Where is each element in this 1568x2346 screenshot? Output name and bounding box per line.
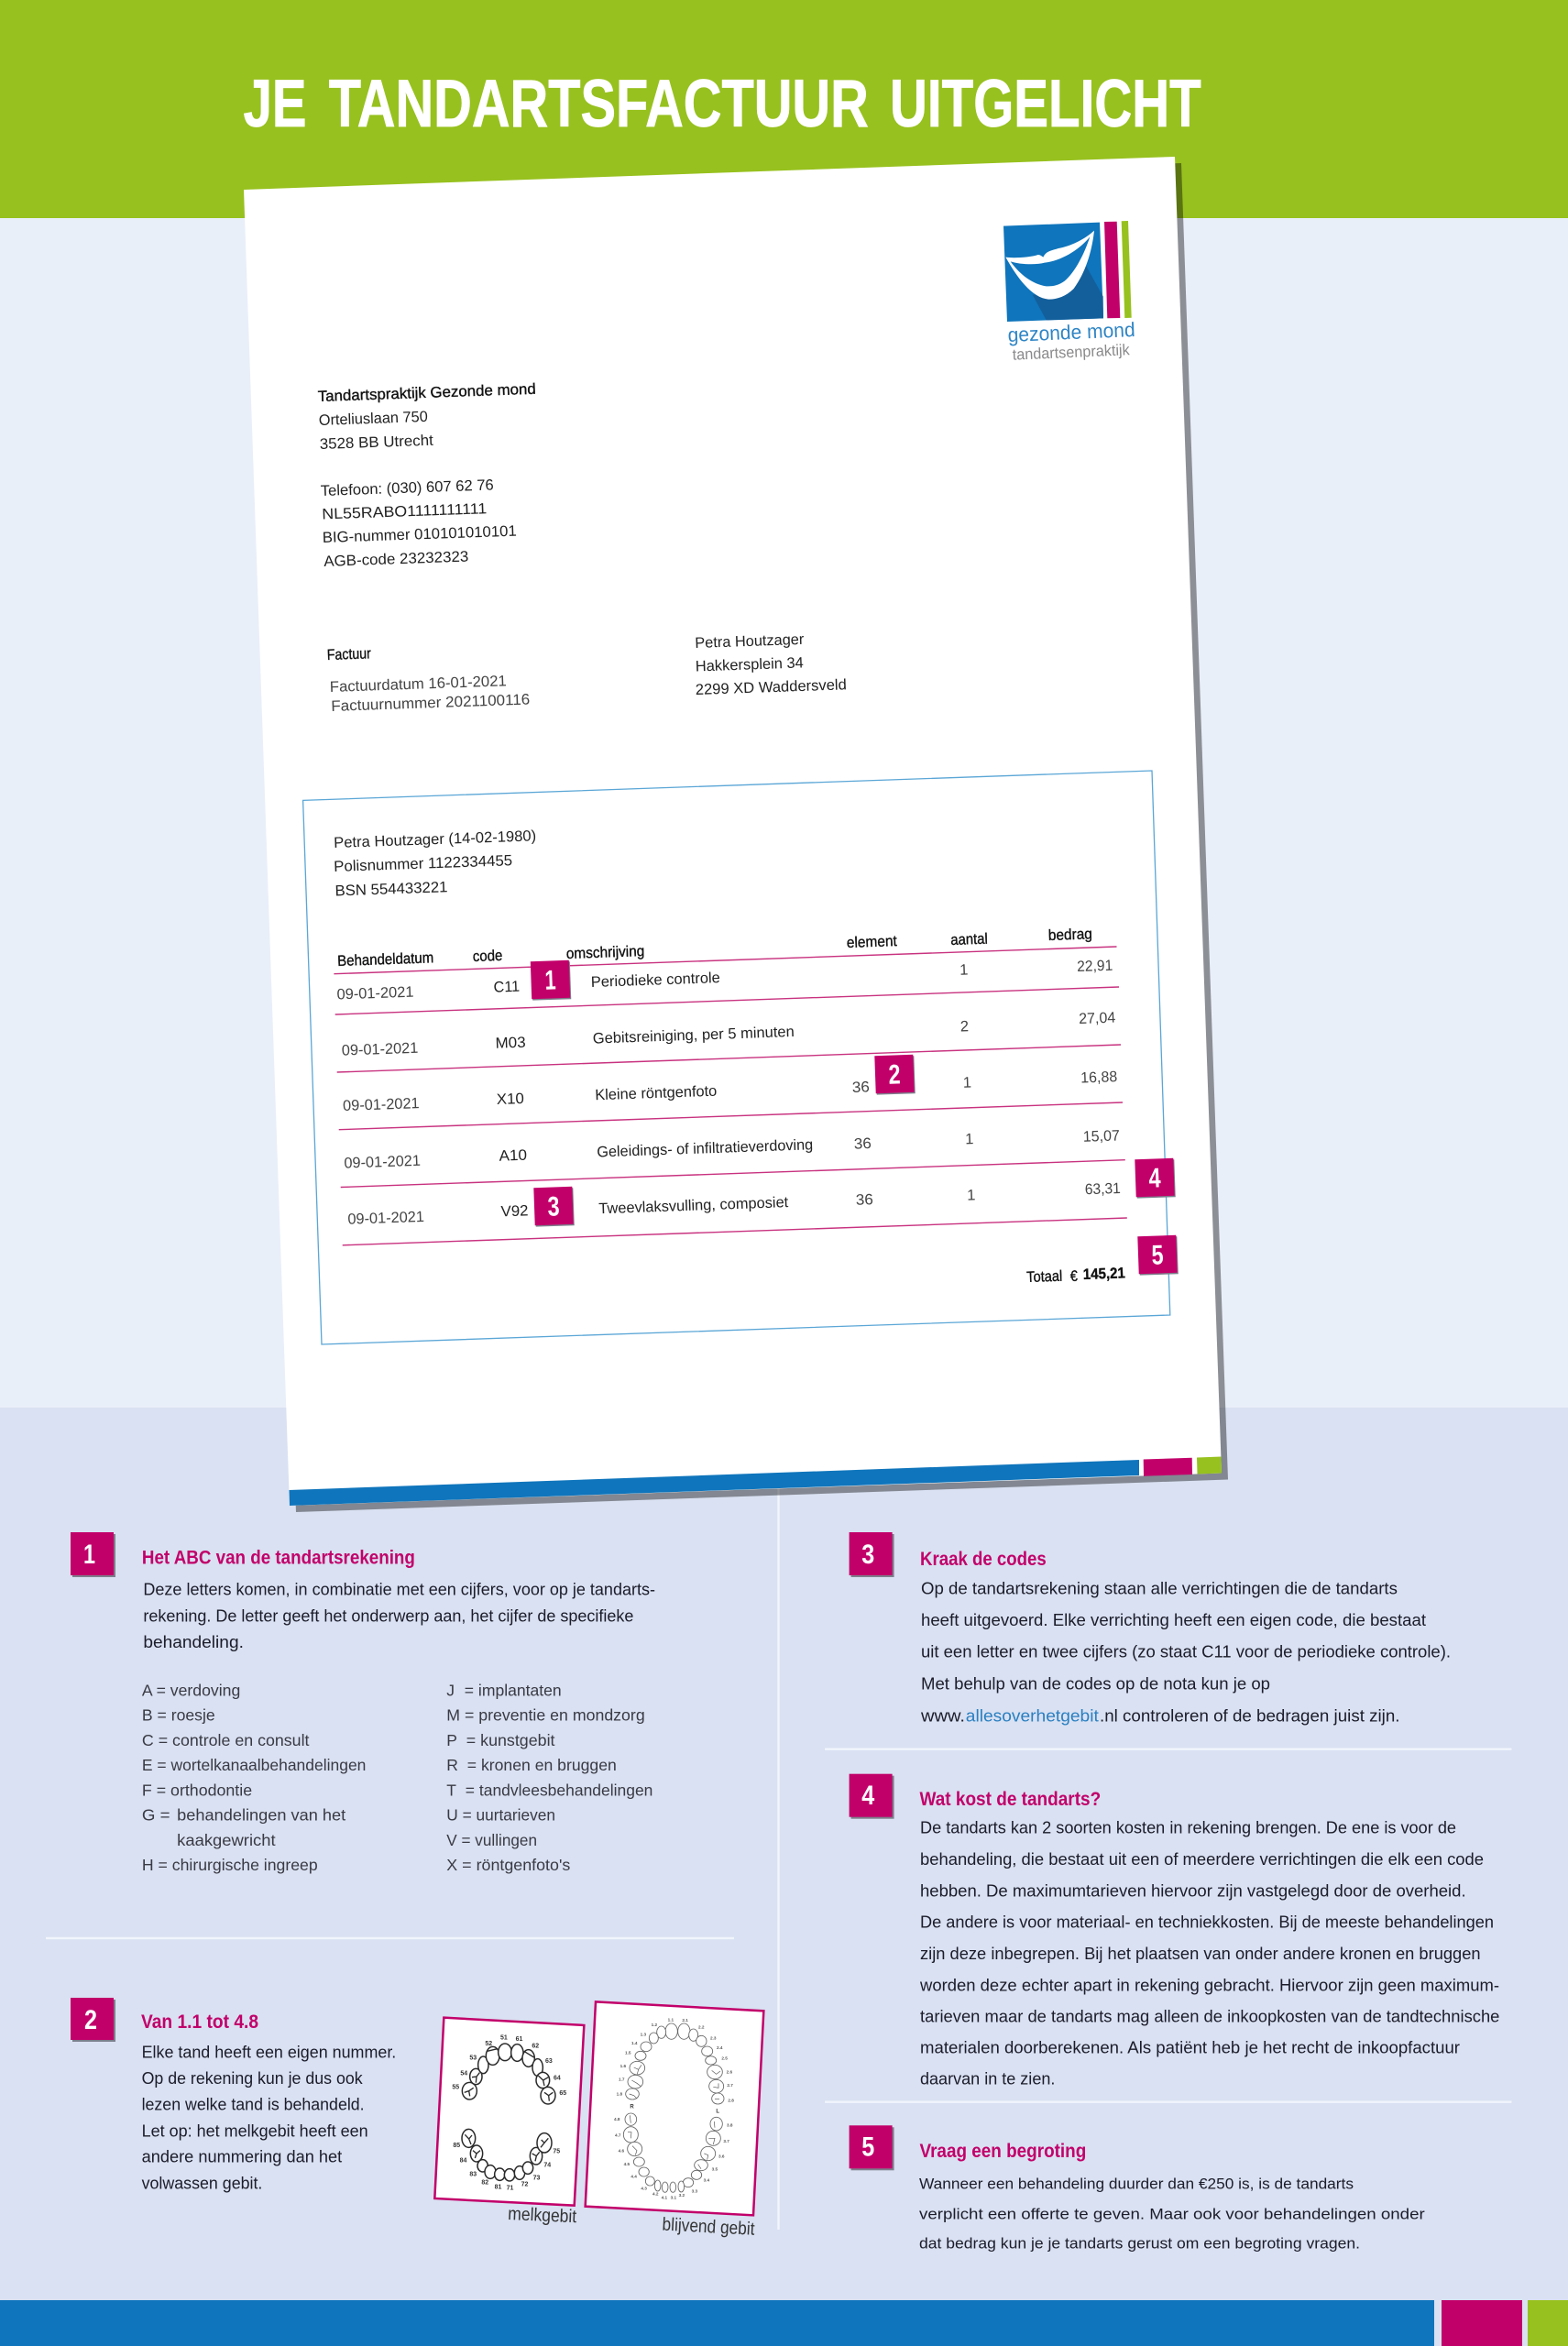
chart: melkgebit tooth diagram: 81 bbox=[495, 2185, 502, 2191]
chart: blijvend gebit tooth diagram: 4.7 bbox=[615, 2133, 621, 2138]
table row: M03: 09-01-2021 bbox=[342, 1040, 419, 1059]
chart: blijvend gebit tooth diagram: 1.5 bbox=[625, 2051, 631, 2055]
chart: blijvend gebit tooth diagram: 1.3 bbox=[641, 2032, 647, 2036]
invoice total: 145,21 bbox=[1083, 1265, 1125, 1283]
badge 3 bbox=[850, 1532, 894, 1577]
table row: X10 bbox=[343, 1069, 1118, 1114]
practice address: BIG-nummer 010101010101 bbox=[323, 523, 517, 546]
chart: blijvend gebit tooth diagram: 2.5 bbox=[721, 2056, 728, 2061]
invoice marker 5 bbox=[1137, 1235, 1179, 1276]
practice address: 3528 BB Utrecht bbox=[320, 433, 433, 453]
chart: melkgebit tooth diagram: 85 bbox=[453, 2143, 460, 2149]
practice address: Orteliuslaan 750 bbox=[319, 409, 428, 429]
paper footer colour band bbox=[290, 1457, 1222, 1506]
body text bbox=[920, 1578, 1451, 1725]
title: UITGELICHT bbox=[890, 67, 1201, 141]
practice address: NL55RABO1111111111 bbox=[322, 500, 488, 522]
heading: Van 1.1 tot 4.8: Van 1.1 tot 4.8 bbox=[141, 2012, 258, 2033]
invoice total bbox=[1026, 1265, 1125, 1286]
chart: blijvend gebit tooth diagram: 2.8 bbox=[728, 2098, 734, 2102]
invoice marker 2 bbox=[874, 1055, 916, 1095]
invoice marker 1: 1 bbox=[544, 965, 556, 996]
chart: blijvend gebit tooth diagram: 4.6 bbox=[619, 2149, 625, 2154]
body text: allesoverhetgebit bbox=[966, 1705, 1099, 1725]
heading: Vraag een begroting: Vraag een begroting bbox=[920, 2141, 1086, 2162]
table row: V92 bbox=[347, 1180, 1121, 1228]
badge 4: 4 bbox=[861, 1781, 875, 1811]
panel: invoice paper bbox=[244, 157, 1222, 1506]
code list right: = tandvleesbehandelingen bbox=[466, 1781, 652, 1799]
patient details bbox=[334, 828, 536, 899]
code list left: kaakgewricht bbox=[177, 1831, 276, 1849]
table row: V92: Tweevlaksvulling, composiet bbox=[598, 1194, 789, 1217]
badge 5 bbox=[850, 2125, 894, 2170]
body text: dat bedrag kun je je tandarts gerust om een begroting vragen. bbox=[919, 2235, 1360, 2253]
chart: melkgebit tooth diagram: 71 bbox=[507, 2185, 514, 2191]
panel: section 2 tooth numbers bbox=[71, 1998, 763, 2240]
chart: melkgebit tooth diagram: 65 bbox=[559, 2090, 566, 2097]
badge 2 bbox=[71, 1998, 115, 2042]
body text: Op de tandartsrekening staan alle verrichtingen die de tandarts bbox=[921, 1578, 1398, 1597]
body text bbox=[142, 2043, 396, 2192]
body text bbox=[919, 1818, 1499, 2088]
code list left: B = roesje bbox=[142, 1706, 215, 1725]
code list right bbox=[446, 1682, 652, 1874]
code list right: = implantaten bbox=[465, 1682, 562, 1700]
chart: blijvend gebit tooth diagram: 3.2 bbox=[679, 2193, 685, 2198]
code list right: P bbox=[446, 1731, 457, 1749]
practice address: Telefoon: (030) 607 62 76 bbox=[321, 477, 494, 499]
table header bbox=[337, 926, 1092, 970]
body text: zijn deze inbegrepen. Bij het plaatsen van onder andere kronen en bruggen bbox=[920, 1944, 1481, 1963]
code list left bbox=[142, 1682, 366, 1874]
table row: X10: Kleine röntgenfoto bbox=[595, 1083, 718, 1103]
invoice marker 3: 3 bbox=[547, 1191, 560, 1222]
chart: blijvend gebit tooth diagram: 1.1 bbox=[668, 2018, 674, 2023]
code list right: V = vullingen bbox=[446, 1831, 537, 1849]
badge 1 bbox=[71, 1532, 115, 1577]
table header: code bbox=[473, 948, 503, 965]
body text: Wanneer een behandeling duurder dan €250 is, is de tandarts bbox=[919, 2176, 1354, 2193]
chart: blijvend gebit tooth diagram: 2.1 bbox=[682, 2018, 688, 2023]
chart: melkgebit tooth diagram: 64 bbox=[554, 2075, 561, 2081]
chart: blijvend gebit tooth diagram: 1.7 bbox=[619, 2077, 625, 2082]
code list left: H = chirurgische ingreep bbox=[142, 1856, 318, 1874]
table header: omschrijving bbox=[566, 943, 645, 962]
body text: De tandarts kan 2 soorten kosten in rekening brengen. De ene is voor de bbox=[920, 1818, 1456, 1837]
invoice marker 1 bbox=[531, 960, 571, 1001]
chart: melkgebit tooth diagram: 84 bbox=[460, 2158, 467, 2165]
heading: Het ABC: Het ABC van de tandartsrekening bbox=[142, 1548, 415, 1569]
table row: A10: 1 bbox=[965, 1131, 974, 1147]
table row: M03: 2 bbox=[960, 1018, 969, 1035]
code list left: C = controle en consult bbox=[142, 1731, 310, 1749]
chart: melkgebit tooth diagram: 62 bbox=[532, 2044, 539, 2050]
table row: A10 bbox=[344, 1127, 1120, 1172]
practice address bbox=[318, 381, 536, 570]
table row: X10: 1 bbox=[963, 1074, 971, 1091]
body text bbox=[919, 2176, 1425, 2253]
invoice marker 4: 4 bbox=[1148, 1163, 1161, 1194]
invoice details: Factuurnummer 2021100116 bbox=[331, 691, 531, 715]
patient details: Petra Houtzager (14-02-1980) bbox=[334, 828, 536, 851]
panel: section 1 ABC bbox=[71, 1532, 655, 1874]
code list right: M = preventie en mondzorg bbox=[446, 1706, 645, 1725]
code list right: X = röntgenfoto's bbox=[446, 1856, 571, 1874]
logo: gezonde mond: gezonde mond bbox=[1007, 318, 1135, 346]
code list right: J bbox=[446, 1682, 455, 1700]
panel: treatment table box bbox=[303, 771, 1170, 1344]
chart: blijvend gebit tooth diagram: R bbox=[630, 2105, 634, 2110]
chart: blijvend gebit tooth diagram: 4.5 bbox=[624, 2162, 630, 2166]
invoice details bbox=[327, 645, 531, 715]
code list right: T bbox=[446, 1781, 456, 1799]
chart: melkgebit tooth diagram: 53 bbox=[469, 2055, 477, 2061]
paper shadow bbox=[250, 163, 1228, 1512]
body text: www. bbox=[920, 1705, 965, 1725]
invoice details: Factuurdatum 16-01-2021 bbox=[330, 673, 507, 696]
code list right: U = uurtarieven bbox=[446, 1806, 555, 1825]
table row: M03 bbox=[342, 1010, 1116, 1059]
table header: element bbox=[847, 933, 897, 951]
chart: melkgebit tooth diagram: 55 bbox=[452, 2085, 459, 2091]
logo: gezonde mond bbox=[1003, 221, 1135, 364]
intro text: behandeling. bbox=[143, 1632, 244, 1651]
logo: gezonde mond: tandartsenpraktijk bbox=[1012, 341, 1131, 364]
invoice marker 4 bbox=[1135, 1158, 1176, 1199]
chart: melkgebit tooth diagram: 83 bbox=[469, 2171, 477, 2177]
panel: section 3 codes bbox=[850, 1532, 1451, 1725]
chart: blijvend gebit tooth diagram: 3.7 bbox=[723, 2139, 729, 2143]
code list left: A = verdoving bbox=[142, 1682, 240, 1700]
table row: A10: 09-01-2021 bbox=[344, 1153, 421, 1172]
chart: blijvend gebit tooth diagram: 3.1 bbox=[671, 2196, 677, 2200]
chart: blijvend gebit tooth diagram: L bbox=[716, 2110, 719, 2115]
chart: blijvend gebit tooth diagram: 4.8 bbox=[614, 2117, 620, 2121]
chart: melkgebit tooth diagram: 61 bbox=[516, 2036, 523, 2043]
table row: C11: 09-01-2021 bbox=[336, 984, 414, 1003]
vertical column divider bbox=[777, 1485, 780, 2230]
table row: C11: 1 bbox=[959, 961, 969, 979]
body text: verplicht een offerte te geven. Maar ook voor behandelingen onder bbox=[919, 2205, 1425, 2222]
table row: V92: 1 bbox=[967, 1187, 976, 1204]
label: blijvend gebit: blijvend gebit bbox=[662, 2215, 755, 2240]
table row: X10: 16,88 bbox=[1080, 1069, 1118, 1086]
chart: blijvend gebit tooth diagram: 3.5 bbox=[712, 2166, 718, 2171]
panel: section 5 estimate bbox=[850, 2125, 1425, 2253]
chart: blijvend gebit tooth diagram: 3.4 bbox=[704, 2178, 710, 2183]
code list right: = kronen en bruggen bbox=[467, 1756, 617, 1774]
chart: melkgebit tooth diagram: 82 bbox=[481, 2179, 488, 2186]
table row: V92: 63,31 bbox=[1085, 1180, 1121, 1198]
recipient address bbox=[695, 631, 847, 698]
chart: melkgebit tooth diagram: 75 bbox=[553, 2149, 560, 2155]
chart: blijvend gebit tooth diagram: 1.2 bbox=[652, 2023, 658, 2027]
table row: M03: 27,04 bbox=[1079, 1010, 1116, 1027]
body text: andere nummering dan het bbox=[142, 2147, 342, 2166]
code list right: = kunstgebit bbox=[466, 1731, 555, 1749]
table row: A10: Geleidings- of infiltratieverdoving bbox=[597, 1136, 813, 1160]
chart: melkgebit tooth diagram bbox=[434, 2018, 584, 2206]
chart: melkgebit tooth diagram: 72 bbox=[521, 2181, 529, 2187]
panel: section 4 costs bbox=[850, 1774, 1499, 2088]
chart: melkgebit tooth diagram: 73 bbox=[533, 2176, 541, 2182]
body text: tarieven maar de tandarts mag alleen de inkoopkosten van de tandtechnische bbox=[920, 2006, 1499, 2025]
table row: V92: 09-01-2021 bbox=[347, 1209, 424, 1228]
code list left: G = bbox=[142, 1806, 170, 1825]
chart: blijvend gebit tooth diagram: 2.3 bbox=[710, 2035, 717, 2040]
body text: uit een letter en twee cijfers (zo staat C11 voor de periodieke controle). bbox=[921, 1642, 1451, 1661]
heading: Kraak de codes: Kraak de codes bbox=[920, 1549, 1047, 1570]
body text: .nl controleren of de bedragen juist zijn. bbox=[1100, 1705, 1400, 1725]
invoice marker 5: 5 bbox=[1151, 1240, 1164, 1271]
body text: lezen welke tand is behandeld. bbox=[142, 2095, 365, 2114]
intro text bbox=[143, 1580, 655, 1651]
table row: X10: 36 bbox=[852, 1079, 870, 1096]
table row: V92: V92 bbox=[500, 1202, 529, 1220]
body text: hebben. De maximumtarieven hiervoor zijn vastgelegd door de overheid. bbox=[920, 1880, 1466, 1900]
chart: blijvend gebit tooth diagram: 4.1 bbox=[662, 2195, 668, 2199]
recipient address: Hakkersplein 34 bbox=[696, 654, 804, 674]
badge 3: 3 bbox=[861, 1540, 874, 1570]
title: JE bbox=[244, 67, 306, 141]
invoice total: € bbox=[1070, 1268, 1078, 1285]
badge 2: 2 bbox=[84, 2005, 97, 2035]
chart: blijvend gebit tooth diagram bbox=[586, 2001, 763, 2215]
table row: C11: 22,91 bbox=[1077, 958, 1113, 975]
table row: C11 bbox=[336, 958, 1113, 1003]
chart: blijvend gebit tooth diagram: 4.2 bbox=[652, 2191, 659, 2196]
chart: blijvend gebit tooth diagram: 4.3 bbox=[641, 2186, 647, 2190]
chart: blijvend gebit tooth diagram: 4.4 bbox=[630, 2174, 637, 2178]
table row: X10: X10 bbox=[497, 1091, 524, 1108]
intro text: Deze letters komen, in combinatie met een cijfers, voor op je tandarts- bbox=[143, 1580, 655, 1599]
chart: melkgebit tooth diagram: 74 bbox=[543, 2162, 551, 2168]
body text: Met behulp van de codes op de nota kun je op bbox=[921, 1674, 1270, 1694]
table row: X10: 09-01-2021 bbox=[343, 1095, 420, 1114]
table row: M03: M03 bbox=[495, 1035, 526, 1052]
chart: melkgebit tooth diagram: 63 bbox=[545, 2058, 553, 2065]
body text: materialen doorberekenen. Als patiënt heb je het recht de inkoopfactuur bbox=[920, 2038, 1460, 2057]
chart: melkgebit tooth diagram: 51 bbox=[500, 2035, 508, 2042]
table row: M03: Gebitsreiniging, per 5 minuten bbox=[593, 1024, 795, 1047]
table header: Behandeldatum bbox=[337, 949, 433, 970]
body text: Let op: het melkgebit heeft een bbox=[142, 2121, 368, 2140]
invoice marker 3 bbox=[533, 1187, 575, 1227]
chart: blijvend gebit tooth diagram: 1.8 bbox=[617, 2092, 623, 2097]
table row: C11: Periodieke controle bbox=[591, 970, 720, 991]
table header: bedrag bbox=[1048, 926, 1092, 944]
chart: blijvend gebit tooth diagram: 3.8 bbox=[727, 2122, 733, 2127]
practice address: Tandartspraktijk Gezonde mond bbox=[318, 381, 536, 405]
badge 1: 1 bbox=[83, 1540, 95, 1570]
chart: blijvend gebit tooth diagram: 2.6 bbox=[727, 2069, 733, 2074]
code list left: E = wortelkanaalbehandelingen bbox=[142, 1756, 366, 1774]
recipient address: 2299 XD Waddersveld bbox=[696, 676, 847, 698]
chart: blijvend gebit tooth diagram: 2.4 bbox=[717, 2045, 723, 2050]
patient details: BSN 554433221 bbox=[334, 879, 448, 899]
badge 4 bbox=[850, 1774, 894, 1819]
table row: V92: 36 bbox=[856, 1191, 873, 1209]
chart: blijvend gebit tooth diagram: 1.4 bbox=[631, 2041, 638, 2045]
heading: Wat kost de tandarts: Wat kost de tandarts? bbox=[920, 1789, 1101, 1810]
code list right: R bbox=[446, 1756, 458, 1774]
code list left: F = orthodontie bbox=[142, 1781, 252, 1799]
body text: De andere is voor materiaal- en techniekkosten. Bij de meeste behandelingen bbox=[920, 1913, 1494, 1932]
invoice marker 2: 2 bbox=[888, 1059, 901, 1091]
table header: aantal bbox=[950, 931, 988, 948]
title: TANDARTSFACTUUR bbox=[329, 67, 869, 141]
body text: Elke tand heeft een eigen nummer. bbox=[142, 2043, 396, 2062]
badge 5: 5 bbox=[861, 2132, 874, 2163]
chart: blijvend gebit tooth diagram: 3.6 bbox=[718, 2154, 725, 2158]
table row: A10: A10 bbox=[499, 1147, 527, 1165]
green header band bbox=[0, 0, 1568, 218]
body text: heeft uitgevoerd. Elke verrichting heeft een eigen code, die bestaat bbox=[921, 1610, 1426, 1629]
intro text: rekening. De letter geeft het onderwerp aan, het cijfer de specifieke bbox=[143, 1606, 633, 1625]
practice address: AGB-code 23232323 bbox=[323, 548, 469, 570]
label: melkgebit: melkgebit bbox=[508, 2204, 577, 2227]
patient details: Polisnummer 1122334455 bbox=[334, 852, 512, 875]
chart: blijvend gebit tooth diagram: 2.2 bbox=[698, 2025, 705, 2030]
recipient address: Petra Houtzager bbox=[695, 631, 805, 652]
invoice details: Factuur bbox=[327, 645, 372, 663]
body text: worden deze echter apart in rekening gebracht. Hiervoor zijn geen maximum- bbox=[919, 1975, 1499, 1994]
chart: blijvend gebit tooth diagram: 2.7 bbox=[727, 2083, 733, 2088]
code list left: behandelingen van het bbox=[177, 1806, 345, 1825]
body text: behandeling, die bestaat uit een of meerdere verrichtingen die elk een code bbox=[920, 1849, 1484, 1869]
chart: blijvend gebit tooth diagram: 3.3 bbox=[692, 2188, 698, 2193]
body text: daarvan in te zien. bbox=[920, 2068, 1055, 2088]
invoice total: Totaal bbox=[1026, 1268, 1063, 1286]
table row: A10: 15,07 bbox=[1083, 1127, 1120, 1146]
body text: Op de rekening kun je dus ook bbox=[142, 2068, 363, 2088]
chart: melkgebit tooth diagram: 54 bbox=[460, 2070, 467, 2077]
table row: C11: C11 bbox=[493, 979, 520, 996]
table row: A10: 36 bbox=[854, 1135, 872, 1153]
chart: melkgebit tooth diagram: 52 bbox=[485, 2041, 492, 2047]
body text: volwassen gebit. bbox=[142, 2173, 262, 2192]
chart: blijvend gebit tooth diagram: 1.6 bbox=[620, 2064, 627, 2068]
footer colour band bbox=[0, 2300, 1568, 2346]
